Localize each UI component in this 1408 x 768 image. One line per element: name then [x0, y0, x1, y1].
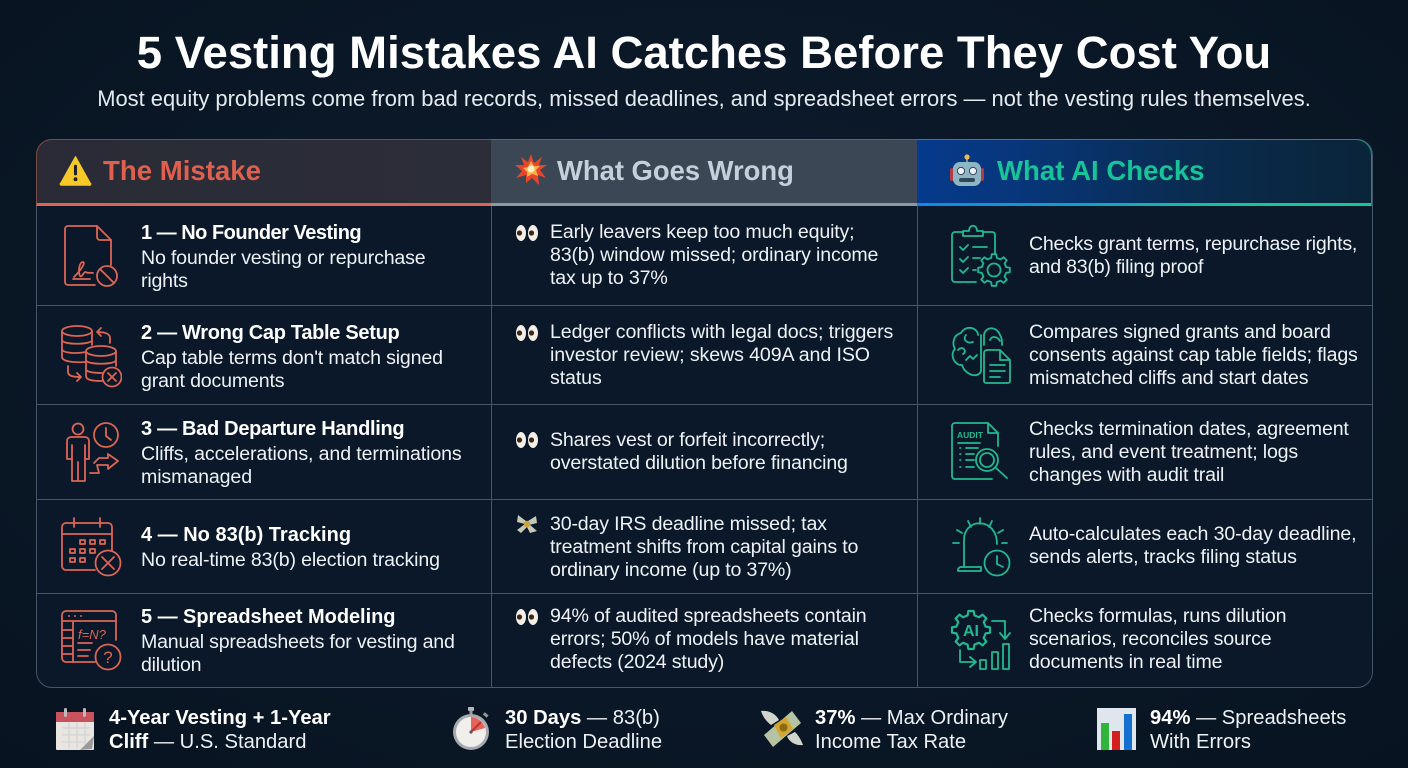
stat text	[109, 707, 331, 753]
table body background	[36, 139, 1373, 688]
mistake 1 text: 1 — No Founder Vesting	[141, 222, 361, 244]
header: what goes wrong	[491, 139, 917, 206]
mistake 3 text: Cliffs, accelerations, and terminations	[141, 443, 462, 465]
icon: spreadsheet with question: f=N?	[78, 627, 107, 642]
consequence 1 text	[550, 221, 878, 289]
mistake 3 text: 3 — Bad Departure Handling	[141, 418, 404, 440]
consequence 4 text: treatment shifts from capital gains to	[550, 536, 858, 558]
emoji: eyes row 1	[516, 225, 538, 241]
mistake 2 text	[141, 322, 443, 392]
consequence 3 text	[550, 429, 848, 474]
icon: warning	[60, 156, 92, 186]
icon: audit magnifier: AUDIT	[957, 430, 984, 440]
icon: ai gear and chart	[950, 610, 1011, 670]
mistake 4 text: No real-time 83(b) election tracking	[141, 549, 440, 571]
mistake 5 text: dilution	[141, 654, 201, 676]
ai check 3 text	[1029, 418, 1349, 486]
mistake 5 text: 5 — Spreadsheet Modeling	[141, 606, 395, 628]
stat text: Cliff — U.S. Standard	[109, 731, 306, 753]
ai check 2 text	[1029, 321, 1358, 389]
icon: unsigned document	[64, 225, 118, 287]
stat text	[815, 706, 1008, 754]
mistake 4 text	[141, 524, 440, 571]
icon: checklist with gear	[951, 224, 1011, 287]
ai check 4 text: Auto-calculates each 30-day deadline,	[1029, 523, 1356, 545]
stat: stopwatch	[453, 707, 662, 753]
consequence 5 text: errors; 50% of models have material	[550, 628, 859, 650]
ai check 1 text: and 83(b) filing proof	[1029, 256, 1203, 278]
consequence 2 text: status	[550, 367, 602, 389]
icon: departing employee	[66, 422, 119, 482]
ai check 1 text: Checks grant terms, repurchase rights,	[1029, 233, 1357, 255]
ai check 4 text: sends alerts, tracks filing status	[1029, 546, 1297, 568]
mistake 2 text: grant documents	[141, 370, 284, 392]
ai check 5 text: documents in real time	[1029, 651, 1222, 673]
mistake 5 text	[141, 606, 455, 676]
ai check 2 text: mismatched cliffs and start dates	[1029, 367, 1308, 389]
header: the mistake	[36, 139, 491, 206]
stat: money	[761, 707, 1008, 753]
stat text: 30 Days — 83(b)	[505, 707, 660, 729]
emoji: eyes row 5	[516, 609, 538, 625]
emoji: eyes row 3	[516, 432, 538, 448]
ai check 3 text: rules, and event treatment; logs	[1029, 441, 1298, 463]
consequence 4 text: 30-day IRS deadline missed; tax	[550, 513, 827, 535]
subtitle: Most equity problems come from bad records, missed deadlines, and spreadsheet errors — not the vesting rules themselves.	[97, 86, 1311, 111]
stat text	[1150, 706, 1346, 754]
consequence 5 text: defects (2024 study)	[550, 651, 724, 673]
mistake 3 text	[141, 418, 462, 488]
stat: calendar	[56, 707, 331, 753]
mistake 2 text: Cap table terms don't match signed	[141, 347, 443, 369]
icon: calendar with cross	[61, 517, 122, 576]
ai check 4 text	[1029, 523, 1356, 568]
icon: bar chart	[1097, 708, 1136, 750]
icon: alarm bell with clock	[952, 517, 1010, 576]
stat text: 94% — Spreadsheets	[1150, 707, 1346, 729]
mistake 1 text	[141, 222, 425, 292]
consequence 2 text: Ledger conflicts with legal docs; triggers	[550, 321, 893, 343]
mistake 2 text: 2 — Wrong Cap Table Setup	[141, 322, 399, 344]
mistake 1 text: No founder vesting or repurchase	[141, 247, 425, 269]
ai check 5 text: Checks formulas, runs dilution	[1029, 605, 1286, 627]
consequence 2 text	[550, 321, 893, 389]
header: what ai checks	[917, 139, 1372, 206]
emoji: flying money small	[517, 515, 537, 533]
consequence 1 text: Early leavers keep too much equity;	[550, 221, 854, 243]
ai check 2 text: consents against cap table fields; flags	[1029, 344, 1358, 366]
header underline gradient	[917, 203, 1371, 206]
stat text: 37% — Max Ordinary	[815, 707, 1008, 729]
consequence 2 text: investor review; skews 409A and ISO	[550, 344, 870, 366]
ai check 5 text	[1029, 605, 1286, 673]
consequence 5 text: 94% of audited spreadsheets contain	[550, 605, 866, 627]
consequence 3 text: Shares vest or forfeit incorrectly;	[550, 429, 825, 451]
stat: bar chart	[1097, 706, 1357, 754]
title: 5 Vesting Mistakes AI Catches Before They Cost You	[137, 27, 1271, 78]
icon: calendar	[56, 708, 94, 750]
ai check 3 text: changes with audit trail	[1029, 464, 1224, 486]
icon: audit magnifier	[951, 422, 1008, 480]
stat text: Income Tax Rate	[815, 731, 966, 753]
consequence 5 text	[550, 605, 866, 673]
icon: money with wings	[760, 708, 803, 750]
heading: what ai checks: What AI Checks	[997, 155, 1205, 186]
icon: brain with document	[952, 326, 1011, 384]
ai check 1 text	[1029, 233, 1357, 278]
icon: ai gear and chart: AI	[963, 623, 979, 640]
ai check 3 text: Checks termination dates, agreement	[1029, 418, 1349, 440]
consequence 1 text: tax up to 37%	[550, 267, 668, 289]
icon: spreadsheet with question: ?	[103, 648, 113, 667]
stat text: Election Deadline	[505, 731, 662, 753]
heading: the mistake: The Mistake	[103, 155, 261, 186]
mistake 4 text: 4 — No 83(b) Tracking	[141, 524, 351, 546]
mistake 5 text: Manual spreadsheets for vesting and	[141, 631, 455, 653]
ai check 2 text: Compares signed grants and board	[1029, 321, 1331, 343]
emoji: eyes row 2	[516, 325, 538, 341]
icon: explosion	[515, 154, 547, 185]
consequence 3 text: overstated dilution before financing	[550, 452, 848, 474]
stat text	[505, 707, 662, 753]
consequence 1 text: 83(b) window missed; ordinary income	[550, 244, 878, 266]
ai check 5 text: scenarios, reconciles source	[1029, 628, 1271, 650]
consequence 4 text: ordinary income (up to 37%)	[550, 559, 792, 581]
icon: spreadsheet with question	[61, 610, 122, 670]
icon: robot	[950, 154, 984, 186]
mistake 1 text: rights	[141, 270, 188, 292]
stat text: With Errors	[1150, 731, 1251, 753]
icon: mismatched databases	[61, 325, 122, 388]
heading: what goes wrong: What Goes Wrong	[557, 155, 794, 186]
stat text: 4-Year Vesting + 1-Year	[109, 707, 331, 729]
consequence 4 text	[550, 513, 858, 581]
mistake 3 text: mismanaged	[141, 466, 252, 488]
icon: stopwatch	[453, 707, 489, 750]
